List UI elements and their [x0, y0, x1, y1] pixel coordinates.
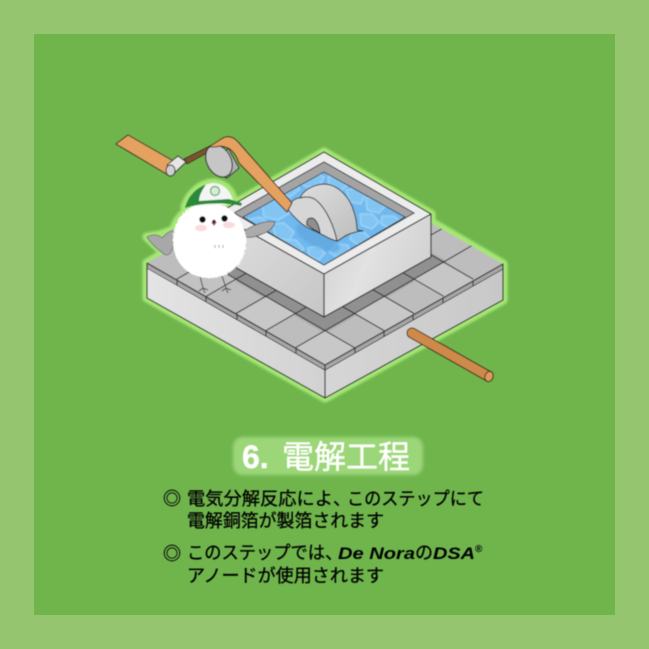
bullet one: 、: [333, 485, 351, 511]
drum body: [300, 184, 363, 241]
drum shadow in water: [297, 225, 340, 252]
bird face: [195, 215, 235, 248]
bullet two: ◎: [163, 540, 181, 566]
drum hole: [307, 218, 320, 233]
tile grid lines: [176, 228, 474, 348]
bullet two: アノードが使用されます: [187, 562, 384, 588]
platform: [146, 222, 504, 400]
foil strip thin link: [184, 146, 214, 164]
bird mascot: [147, 183, 275, 293]
foil strip over roller into basin: [209, 137, 292, 212]
bullet list: [163, 485, 484, 588]
foil strip left: [116, 135, 175, 176]
bullet one: このステップにて: [347, 485, 484, 511]
bird feet: [199, 276, 231, 293]
bird cap: [185, 183, 242, 208]
copper output pipe: [412, 333, 495, 383]
bird right wing: [243, 222, 275, 237]
basin: [217, 152, 431, 317]
copper foil belt: [116, 135, 292, 212]
bullet one: 電解銅箔が製箔されます: [187, 507, 384, 533]
bullet two: の: [415, 539, 433, 565]
basin inner wall: [234, 162, 414, 265]
bullet one: ◎: [163, 485, 181, 511]
bullet one: [163, 485, 484, 533]
drum front face: [287, 197, 337, 241]
bullet two: DSA: [433, 545, 475, 563]
bird tail: [147, 229, 178, 255]
winding roller: [166, 156, 186, 176]
platform tile surface: [147, 162, 503, 365]
basin rim: [217, 152, 431, 274]
bullet two: ®: [475, 544, 483, 555]
title background pill: [233, 437, 423, 475]
title badge: [233, 437, 423, 475]
water surface: [243, 172, 405, 265]
bullet two: 、: [325, 539, 343, 565]
platform right side: [325, 264, 503, 398]
basin right wall: [324, 214, 431, 317]
basin edges: [217, 152, 431, 317]
bullet two: このステップでは: [187, 539, 325, 565]
drum in water: [287, 184, 363, 241]
bullet two: De Nora: [338, 545, 415, 563]
basin left wall: [217, 214, 324, 317]
bullet two: [163, 539, 483, 588]
bird body: [173, 203, 246, 278]
title text: 電解工程: [282, 439, 410, 475]
bullet one: 電気分解反応によ: [187, 485, 333, 511]
illustration: electrolysis step: [116, 135, 503, 398]
title text: 6.: [242, 439, 269, 475]
glow outline around equipment and bird: [147, 152, 503, 398]
platform edge lip: [147, 263, 503, 369]
platform left side: [147, 263, 325, 398]
upper roller: [200, 140, 239, 182]
